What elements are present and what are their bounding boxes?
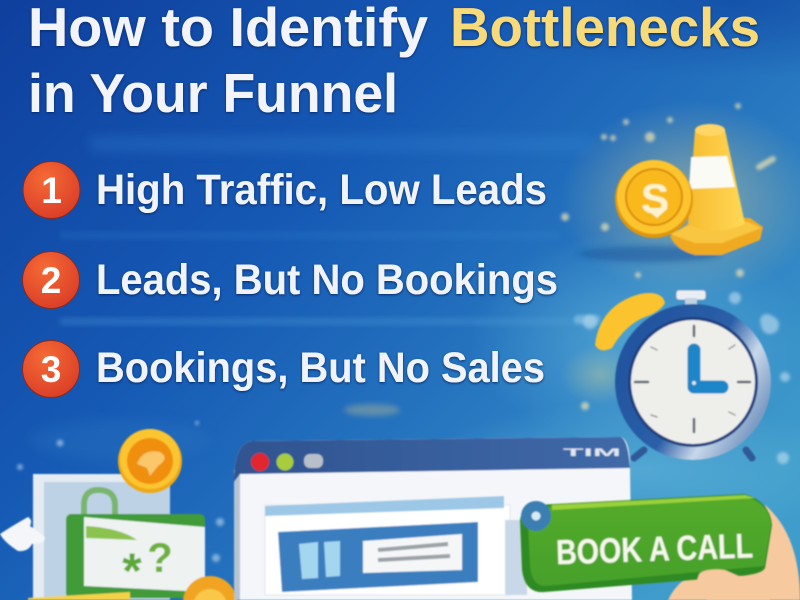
icon: blue badge (521, 501, 551, 531)
icon: traffic cone with coin: S (641, 175, 669, 222)
list item 1: 1 (41, 170, 62, 211)
list item 3 (22, 340, 545, 398)
illustration: document with green card: * (122, 543, 142, 599)
list item 2: 2 (41, 260, 61, 301)
illustration: document with green card (0, 474, 237, 600)
icon: stopwatch clock (595, 290, 771, 460)
list item 2: Leads, But No Bookings (96, 256, 558, 304)
icon: traffic cone with coin (578, 124, 763, 262)
list item 1 (23, 162, 547, 218)
list item 1: High Traffic, Low Leads (96, 166, 547, 214)
illustration: document with green card: ? (147, 534, 173, 581)
button: book a call: BOOK A CALL (555, 527, 754, 572)
icon: coin (118, 429, 182, 493)
list item 3: Bookings, But No Sales (96, 344, 545, 392)
button: book a call (520, 494, 772, 600)
title: in Your Funnel (28, 62, 398, 124)
browser window: TIM (563, 447, 621, 459)
title (28, 0, 760, 124)
browser window (234, 437, 632, 600)
list item 2 (22, 252, 558, 308)
list item 3: 3 (41, 349, 61, 390)
icon: hand holding button (668, 505, 800, 600)
icon: hand arrow (0, 517, 45, 551)
